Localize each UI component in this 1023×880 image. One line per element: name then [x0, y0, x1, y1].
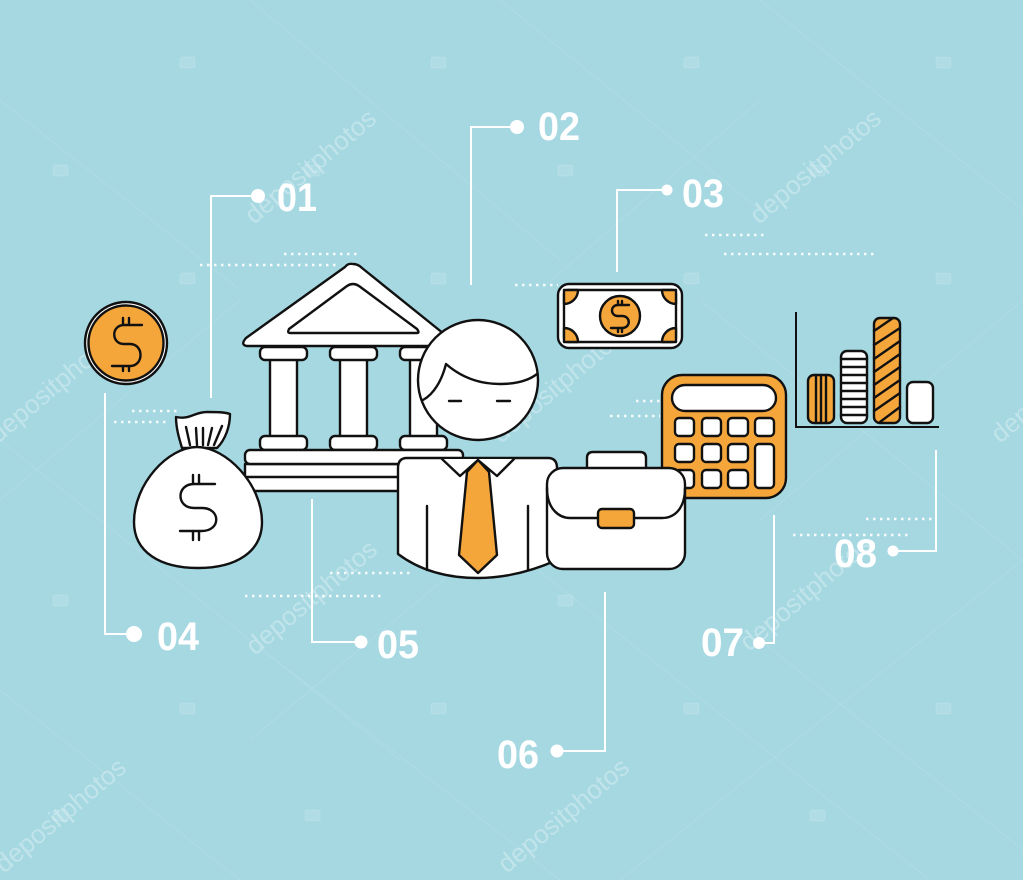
callout 08: 08 [834, 532, 877, 576]
callout 02: 02 [538, 105, 580, 149]
bar 3 [874, 318, 900, 423]
callout 02 [471, 105, 580, 285]
callout 05: 05 [377, 623, 419, 667]
callout 03: 03 [682, 172, 724, 216]
torso [398, 458, 557, 578]
callout 07: 07 [701, 621, 744, 665]
icon: briefcase [547, 452, 685, 569]
bar 2 [841, 351, 867, 423]
callout 07 [701, 515, 774, 665]
bank columns [260, 347, 447, 450]
callout 04: 04 [157, 615, 200, 659]
icon: banknote [558, 284, 682, 348]
icon: calculator [662, 375, 786, 498]
icon: money bag [134, 412, 262, 568]
watermarks: depositphotos [486, 322, 629, 449]
callout 01: 01 [277, 176, 317, 220]
watermark camera marks [53, 57, 951, 821]
icon: coin [85, 302, 167, 384]
head [418, 320, 538, 440]
watermarks: depositphotos [744, 103, 887, 230]
callout 06: 06 [497, 733, 539, 777]
chart axes [796, 312, 939, 427]
watermarks: depositphotos [240, 534, 383, 661]
dotted accent lines [114, 235, 935, 596]
watermarks: depositphotos [239, 103, 382, 230]
icon: bank [243, 264, 463, 491]
callout 03 [617, 172, 724, 272]
collar [442, 459, 514, 476]
bar chart [796, 312, 939, 427]
bank steps [245, 450, 463, 491]
bank roof [243, 264, 459, 346]
calculator keys [675, 418, 774, 488]
callout 06 [497, 592, 605, 777]
callout 08 [834, 450, 936, 576]
callout 05 [312, 499, 419, 667]
icon: businessman [398, 320, 557, 578]
tie [459, 460, 497, 573]
callout 01 [211, 176, 317, 398]
bar 1 [808, 375, 834, 423]
watermarks: depositphotos [492, 752, 635, 879]
watermarks: depositphotos [734, 530, 877, 657]
callout 04 [105, 393, 200, 659]
calculator display [672, 385, 776, 411]
bar 4 [907, 382, 933, 423]
